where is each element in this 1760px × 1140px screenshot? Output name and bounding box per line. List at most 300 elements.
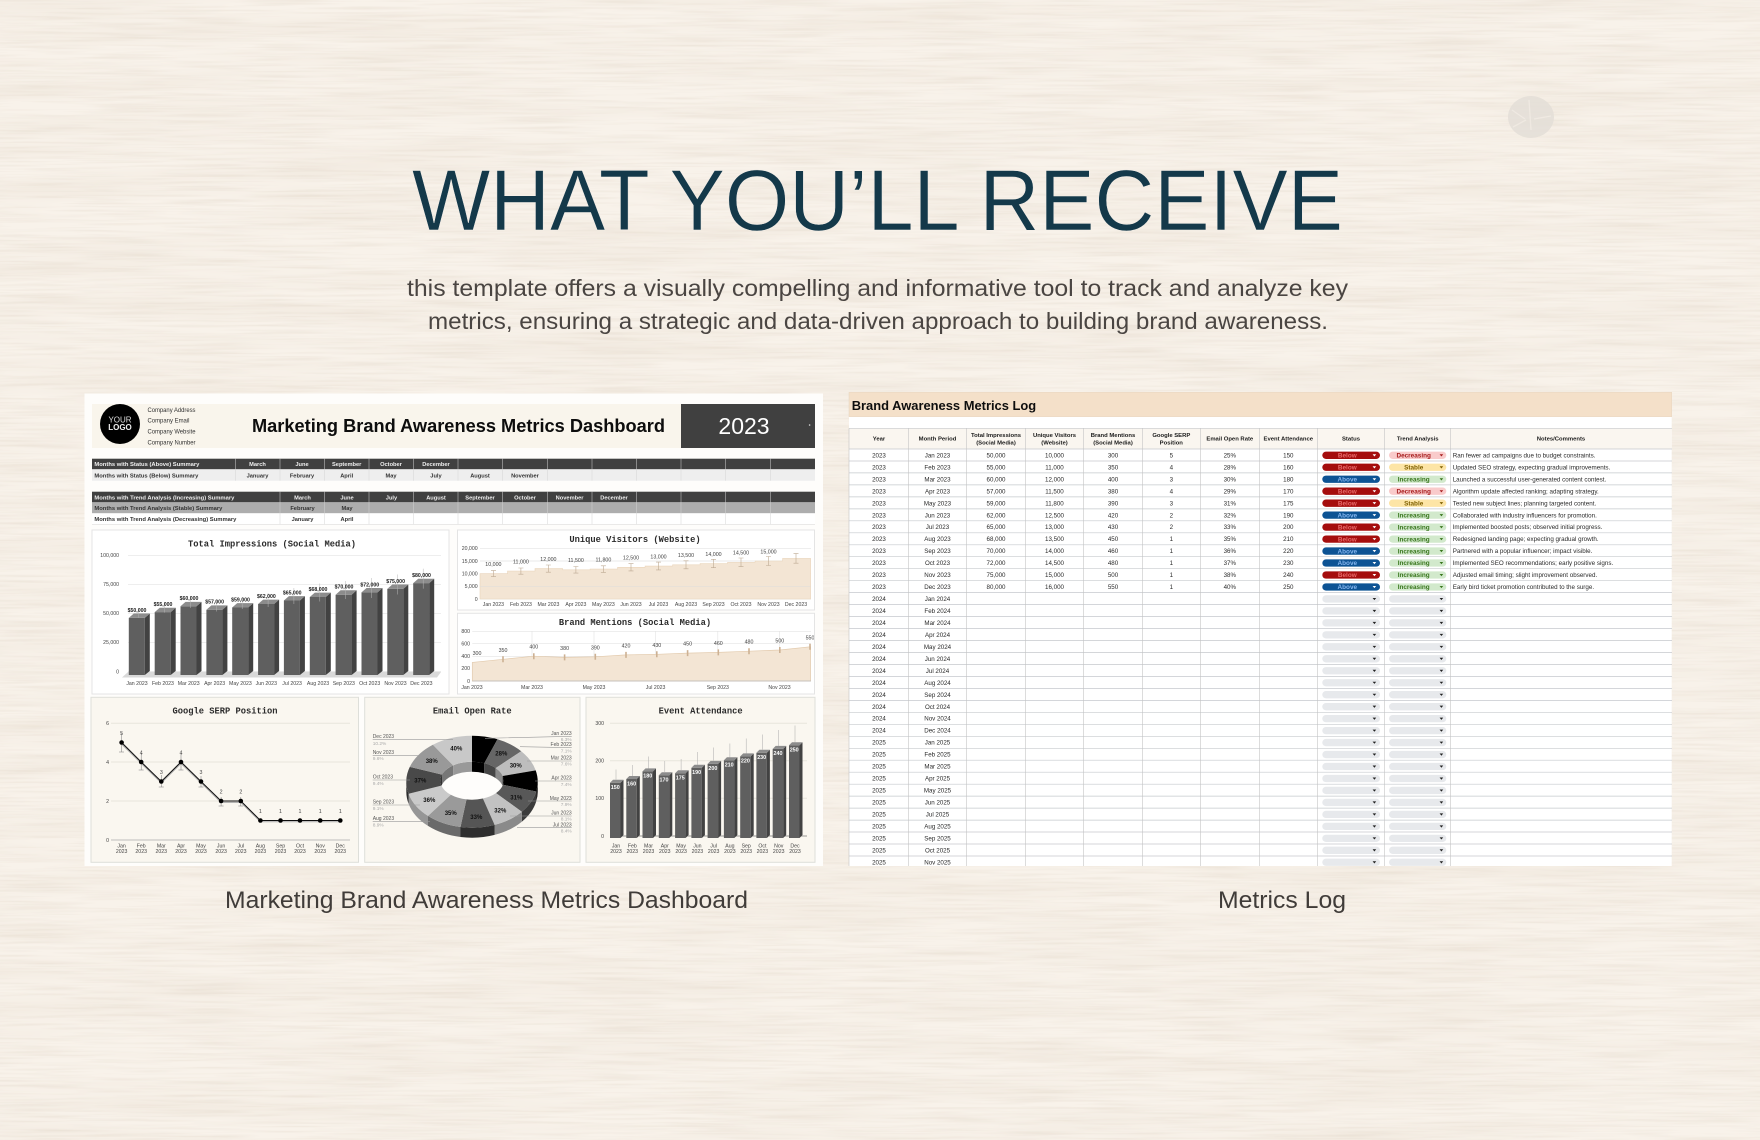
filled rows 2023: Increasing — [1398, 572, 1430, 579]
filled rows 2023: Stable — [1404, 500, 1424, 507]
bar value labels: $75,000 — [386, 579, 405, 585]
bar value labels: 190 — [692, 770, 701, 776]
bars — [129, 569, 434, 675]
x axis labels: Mar 2023 — [537, 602, 559, 608]
panel: unique visitors area chart: 0 — [475, 597, 478, 603]
filled rows 2023: 1 — [1170, 548, 1174, 555]
empty rows 2024: Apr 2024 — [925, 632, 951, 639]
filled rows 2023: 2023 — [872, 584, 886, 591]
left slice labels: 9.4% — [373, 781, 384, 787]
panel: dashboard preview — [84, 394, 823, 866]
trend summary table: December — [600, 495, 629, 501]
empty rows 2025: 2025 — [872, 740, 886, 747]
table header row: (Social Media) — [1093, 440, 1133, 446]
x axis labels: 2023 — [773, 849, 785, 855]
x axis labels: 2023 — [195, 849, 207, 855]
filled rows 2023: 170 — [1283, 488, 1294, 495]
area data labels: 350 — [499, 648, 507, 654]
x axis labels: Jun 2023 — [620, 602, 642, 608]
x axis labels: Oct — [758, 844, 767, 850]
x axis labels: Jan — [117, 844, 126, 850]
donut outer walls — [406, 782, 538, 838]
filled rows 2023: Collaborated with industry influencers for promotion. — [1453, 512, 1597, 519]
trend summary table: Months with Trend Analysis (Increasing) Summary — [94, 495, 235, 501]
bar value labels: $60,000 — [180, 596, 198, 602]
x axis labels: Apr 2023 — [204, 681, 225, 687]
filled rows 2023: Above — [1338, 560, 1358, 567]
filled rows 2023: Jun 2023 — [925, 512, 951, 519]
panel: metrics log table — [849, 392, 1672, 866]
filled rows 2023: 50,000 — [987, 452, 1006, 459]
empty rows 2024: Aug 2024 — [924, 680, 951, 687]
company details: Company Address — [148, 408, 196, 414]
status summary table: July — [430, 473, 443, 479]
trend summary table: November — [556, 495, 584, 501]
filled rows 2023: Below — [1338, 524, 1357, 531]
filled rows 2023: 240 — [1283, 572, 1294, 579]
x axis labels: Dec 2023 — [785, 602, 807, 608]
filled rows 2023: 5 — [1170, 452, 1174, 459]
area data labels: 13,000 — [650, 554, 667, 560]
empty rows 2025: May 2025 — [924, 788, 952, 795]
bar value labels: $59,000 — [231, 597, 250, 603]
status summary table: Months with Status (Below) Summary — [94, 473, 199, 479]
table header row: Total Impressions — [971, 433, 1022, 439]
left slice labels: 10.2% — [373, 741, 387, 747]
filled rows 2023: 175 — [1283, 500, 1294, 507]
status summary table: April — [340, 473, 354, 479]
chart heading: Unique Visitors (Website) — [569, 535, 701, 545]
x axis labels — [116, 844, 346, 855]
status summary table: March — [249, 462, 266, 468]
filled rows 2023: 12,000 — [1045, 476, 1065, 483]
empty rows 2024: Feb 2024 — [924, 608, 951, 615]
left slice labels: 9.1% — [373, 806, 384, 812]
stepped area — [480, 558, 811, 599]
right slice labels: Mar 2023 — [551, 756, 572, 762]
bar value labels: 220 — [741, 759, 750, 765]
filled rows 2023: 11,800 — [1045, 500, 1064, 507]
x axis labels: 2023 — [255, 849, 266, 855]
x axis labels: Jun 2023 — [256, 681, 277, 687]
right slice labels: Apr 2023 — [551, 776, 572, 782]
bar value labels: 175 — [676, 776, 685, 782]
table header row: Event Attendance — [1264, 436, 1314, 442]
point labels: 4 — [140, 750, 143, 756]
x axis labels: Jun — [693, 844, 702, 850]
filled rows 2023: Dec 2023 — [924, 584, 951, 591]
dashboard title: Marketing Brand Awareness Metrics Dashboard — [252, 416, 665, 436]
status summary table: June — [295, 462, 309, 468]
filled rows 2023: 14,000 — [1045, 548, 1065, 555]
filled rows 2023: Adjusted email timing; slight improvement observed. — [1453, 572, 1597, 579]
panel: brand mentions area chart — [458, 613, 814, 694]
x axis labels: Feb 2023 — [152, 681, 174, 687]
filled rows 2023: 300 — [1108, 452, 1119, 459]
left slice labels: Dec 2023 — [373, 734, 394, 740]
filled rows 2023: 35% — [1224, 536, 1236, 543]
bar value labels: 250 — [790, 748, 799, 754]
filled rows 2023: Increasing — [1398, 512, 1430, 519]
right slice labels: 8.4% — [561, 829, 572, 835]
empty rows 2025: Jan 2025 — [925, 740, 951, 747]
bar value labels: $57,000 — [205, 600, 224, 606]
filled rows 2023: 1 — [1170, 572, 1174, 579]
x axis labels: May — [676, 844, 686, 850]
empty rows 2024: 2024 — [872, 644, 886, 651]
area data labels — [485, 549, 777, 568]
table header row: Brand Mentions — [1091, 433, 1136, 439]
table header row: Trend Analysis — [1397, 436, 1439, 442]
x axis labels: May 2023 — [229, 681, 252, 687]
company details: Company Website — [148, 429, 196, 435]
x axis labels: Aug 2023 — [307, 681, 329, 687]
dashboard header band — [92, 404, 815, 448]
x axis labels: 2023 — [175, 849, 187, 855]
bar value labels: 160 — [627, 781, 636, 787]
filled rows 2023: 13,000 — [1045, 524, 1065, 531]
point labels: 2 — [239, 790, 242, 796]
x axis labels: Oct — [296, 844, 305, 850]
x axis labels: Jan — [612, 844, 620, 850]
bar value labels: 200 — [708, 766, 717, 772]
status summary table: May — [385, 473, 397, 479]
left slice labels: 8.9% — [373, 822, 384, 828]
filled rows 2023: 2023 — [872, 548, 886, 555]
filled rows 2023: 250 — [1283, 584, 1294, 591]
company details — [148, 408, 196, 446]
icon: company logo — [100, 404, 140, 444]
filled rows 2023: 10,000 — [1045, 452, 1065, 459]
panel: brand mentions area chart: 800 — [461, 629, 470, 635]
trend summary table: April — [341, 517, 354, 523]
x axis labels: Jul — [710, 844, 717, 850]
filled rows 2023: 460 — [1108, 548, 1119, 555]
bar value labels: $80,000 — [412, 573, 431, 579]
x axis labels: Nov — [774, 844, 784, 850]
filled rows 2023: 11,000 — [1045, 464, 1064, 471]
panel: total impressions bar chart: 100,000 — [100, 553, 119, 559]
error markers — [503, 644, 810, 662]
filled rows 2023: 3 — [1170, 500, 1174, 507]
filled rows 2023: 1 — [1170, 584, 1174, 591]
icon: company logo: YOUR — [108, 416, 132, 424]
bar value labels: 150 — [611, 785, 620, 791]
filled rows 2023: 59,000 — [987, 500, 1006, 507]
filled rows 2023: 2023 — [872, 572, 886, 579]
point labels: 3 — [200, 770, 203, 776]
filled rows 2023: Implemented boosted posts; observed initial progress. — [1453, 524, 1603, 531]
bar value labels: 240 — [774, 751, 782, 757]
bar value labels: 230 — [757, 755, 766, 761]
left slice labels — [373, 734, 394, 828]
filled rows 2023: 480 — [1108, 560, 1119, 567]
x axis labels: Oct 2023 — [359, 681, 380, 687]
filled rows 2023: 33% — [1224, 524, 1236, 531]
x axis labels: 2023 — [335, 849, 346, 855]
empty rows 2024: Jun 2024 — [925, 656, 951, 663]
filled rows 2023: Implemented SEO recommendations; early positive signs. — [1453, 560, 1613, 567]
filled rows 2023: Sep 2023 — [924, 548, 951, 555]
filled rows 2023: 2023 — [872, 488, 886, 495]
area data labels: 15,000 — [760, 549, 777, 555]
x axis labels — [126, 681, 433, 687]
empty rows 2025: 2025 — [872, 764, 886, 771]
x axis labels: Mar 2023 — [178, 681, 200, 687]
area data labels: 500 — [775, 638, 784, 644]
filled rows 2023: Aug 2023 — [924, 536, 951, 543]
filled rows 2023: 2023 — [872, 536, 886, 543]
bar value labels — [128, 573, 431, 614]
filled rows 2023: Mar 2023 — [924, 476, 951, 483]
panel: unique visitors area chart — [458, 530, 814, 610]
x axis labels: Mar — [644, 844, 653, 850]
filled rows 2023: 2 — [1170, 512, 1174, 519]
filled rows 2023: 32% — [1224, 512, 1236, 519]
empty rows 2024: Oct 2024 — [925, 704, 951, 711]
year selector — [681, 404, 815, 448]
x axis labels: Nov 2023 — [757, 602, 780, 608]
filled rows 2023: 180 — [1283, 476, 1294, 483]
filled rows 2023: 1 — [1170, 536, 1174, 543]
x axis labels: 2023 — [724, 849, 736, 855]
table header row: Email Open Rate — [1206, 436, 1254, 442]
trend summary table: August — [426, 495, 446, 501]
point labels: 1 — [259, 809, 262, 815]
x axis labels: 2023 — [135, 849, 147, 855]
subtitle text: this template offers a visually compelling and informative tool to track and analyze key — [407, 275, 1348, 301]
x axis labels: Jul 2023 — [646, 685, 666, 691]
chart heading: Google SERP Position — [172, 706, 278, 716]
table header row: Notes/Comments — [1537, 436, 1586, 442]
slice percentage labels: 35% — [445, 811, 457, 817]
empty rows 2025 — [872, 739, 1446, 866]
panel: event attendance bar chart: 100 — [595, 796, 604, 802]
x axis labels: Jan 2023 — [126, 681, 148, 687]
leader lines — [373, 736, 572, 828]
filled rows 2023: Below — [1338, 452, 1357, 459]
area data labels: 11,000 — [513, 560, 529, 566]
status summary table: Months with Status (Above) Summary — [94, 462, 200, 468]
filled rows 2023: 160 — [1283, 464, 1294, 471]
x axis labels: Mar — [157, 844, 166, 850]
x axis labels: 2023 — [627, 849, 638, 855]
x axis labels: 2023 — [757, 849, 768, 855]
x axis labels: 2023 — [789, 849, 801, 855]
x axis labels: Jul 2023 — [649, 602, 668, 608]
subtitle text — [407, 275, 1348, 334]
empty rows 2025: Mar 2025 — [924, 764, 951, 771]
filled rows 2023: 4 — [1170, 464, 1174, 471]
empty rows 2024: Nov 2024 — [924, 716, 951, 723]
trend summary table: January — [292, 517, 314, 523]
status summary table: December — [422, 462, 451, 468]
panel: google serp line chart: 4 — [106, 760, 109, 766]
filled rows 2023: 29% — [1224, 488, 1236, 495]
filled rows 2023: 2023 — [872, 452, 886, 459]
empty rows 2024: 2024 — [872, 608, 886, 615]
x axis labels: Apr — [661, 844, 669, 850]
filled rows 2023: 380 — [1108, 488, 1119, 495]
filled rows 2023: 16,000 — [1045, 584, 1065, 591]
panel: brand mentions area chart: 0 — [467, 679, 470, 685]
empty rows 2024: 2024 — [872, 692, 886, 699]
slice percentage labels: 31% — [510, 796, 523, 802]
filled rows 2023: 30% — [1224, 476, 1236, 483]
panel: total impressions bar chart: 50,000 — [103, 611, 119, 617]
area data labels: 390 — [591, 645, 600, 651]
filled rows 2023: Ran fewer ad campaigns due to budget constraints. — [1453, 452, 1596, 459]
panel: google serp line chart: 0 — [106, 838, 109, 844]
x axis labels: 2023 — [740, 849, 752, 855]
point labels: 1 — [319, 809, 322, 815]
filled rows 2023: Jan 2023 — [925, 452, 951, 459]
filled rows 2023: Increasing — [1398, 476, 1430, 483]
x axis labels — [610, 844, 801, 855]
filled rows 2023: Below — [1338, 536, 1357, 543]
empty rows 2024: Dec 2024 — [924, 728, 951, 735]
right slice labels: May 2023 — [550, 796, 572, 802]
table header row: Month Period — [919, 436, 957, 442]
point labels: 2 — [220, 790, 223, 796]
table header row: Unique Visitors — [1033, 433, 1077, 439]
x axis labels: Apr — [177, 844, 185, 850]
empty rows 2025: Sep 2025 — [924, 835, 951, 842]
left slice labels: Sep 2023 — [373, 800, 394, 806]
slice percentage labels — [414, 746, 523, 821]
x axis labels — [483, 602, 807, 608]
filled rows 2023: 420 — [1108, 512, 1119, 519]
x axis labels: Sep 2023 — [702, 602, 725, 608]
x axis labels: Mar 2023 — [521, 685, 543, 691]
panel: unique visitors area chart: 20,000 — [462, 546, 478, 552]
right slice labels: Jun 2023 — [551, 811, 572, 817]
filled rows 2023: 11,500 — [1045, 488, 1064, 495]
filled rows 2023: 190 — [1283, 512, 1294, 519]
filled rows 2023: Increasing — [1398, 536, 1430, 543]
empty rows 2024: 2024 — [872, 704, 886, 711]
trend summary table: October — [514, 495, 537, 501]
filled rows 2023: 57,000 — [987, 488, 1006, 495]
area data labels: 400 — [529, 645, 538, 651]
x axis labels: 2023 — [156, 849, 167, 855]
x axis labels: Oct 2023 — [730, 602, 752, 608]
filled rows 2023: 12,500 — [1045, 512, 1065, 519]
bar value labels: $50,000 — [128, 608, 146, 614]
filled rows 2023: 220 — [1283, 548, 1294, 555]
filled rows 2023: 80,000 — [987, 584, 1006, 591]
filled rows 2023: Decreasing — [1396, 452, 1431, 459]
x axis labels: 2023 — [294, 849, 306, 855]
chart heading: Brand Mentions (Social Media) — [559, 618, 711, 628]
empty rows 2024: 2024 — [872, 620, 886, 627]
chart heading: Email Open Rate — [433, 706, 512, 716]
slice percentage labels: 28% — [495, 752, 508, 758]
empty rows 2025: 2025 — [872, 835, 886, 842]
trend summary table: March — [294, 495, 311, 501]
panel: event attendance bar chart — [586, 697, 815, 862]
x axis labels: 2023 — [314, 849, 326, 855]
slice percentage labels: 33% — [470, 815, 483, 821]
empty rows 2024: Sep 2024 — [924, 692, 951, 699]
panel: total impressions bar chart: 75,000 — [103, 582, 119, 588]
filled rows 2023: 62,000 — [987, 512, 1006, 519]
empty rows 2025: 2025 — [872, 800, 886, 807]
area — [472, 647, 811, 681]
panel: unique visitors area chart: 15,000 — [462, 559, 478, 565]
table header row — [849, 428, 1672, 449]
status summary table: February — [290, 473, 315, 479]
filled rows 2023: 2023 — [872, 464, 886, 471]
status summary table — [92, 459, 815, 481]
x axis labels: Jul 2023 — [282, 681, 302, 687]
slice percentage labels: 36% — [423, 798, 436, 804]
x axis labels: Jan 2023 — [461, 685, 483, 691]
bar value labels: $65,000 — [283, 590, 302, 596]
x axis labels: Apr 2023 — [565, 602, 587, 608]
filled rows 2023: Apr 2023 — [925, 488, 951, 495]
status summary table: November — [511, 473, 540, 479]
filled rows 2023: 2023 — [872, 560, 886, 567]
table header row: Position — [1160, 440, 1183, 446]
trend summary table: June — [340, 495, 354, 501]
x axis labels: 2023 — [235, 849, 247, 855]
filled rows 2023: 14,500 — [1045, 560, 1065, 567]
empty rows 2025: Aug 2025 — [924, 823, 951, 830]
right slice labels: 7.1% — [561, 748, 572, 754]
x axis labels: May 2023 — [583, 685, 605, 691]
filled rows 2023: 72,000 — [987, 560, 1006, 567]
trend summary table: July — [386, 495, 398, 501]
filled rows 2023: 210 — [1283, 536, 1294, 543]
filled rows 2023: 2023 — [872, 512, 886, 519]
filled rows 2023: Stable — [1404, 464, 1424, 471]
x axis labels: 2023 — [692, 849, 703, 855]
donut slices — [406, 736, 538, 828]
x axis labels: May — [196, 844, 206, 850]
trend summary table: Months with Trend Analysis (Stable) Summary — [94, 506, 223, 512]
filled rows 2023: Early bird ticket promotion contributed to the surge. — [1453, 584, 1594, 591]
filled rows 2023: 400 — [1108, 476, 1119, 483]
table title band: Brand Awareness Metrics Log — [852, 398, 1036, 413]
filled rows 2023: Increasing — [1398, 584, 1430, 591]
table header row: (Website) — [1041, 440, 1068, 446]
filled rows 2023: 75,000 — [987, 572, 1006, 579]
filled rows 2023: 230 — [1283, 560, 1294, 567]
slice percentage labels: 38% — [426, 759, 438, 765]
filled rows 2023: Above — [1338, 584, 1358, 591]
filled rows 2023: 450 — [1108, 536, 1119, 543]
trend summary table: May — [341, 506, 353, 512]
trend summary table: Months with Trend Analysis (Decreasing) Summary — [94, 517, 237, 523]
area data labels: 14,500 — [733, 551, 749, 557]
icon: wood knot — [1508, 96, 1554, 138]
empty rows 2024: 2024 — [872, 716, 886, 723]
empty rows 2025: Oct 2025 — [925, 847, 951, 854]
panel: google serp line chart — [91, 697, 358, 862]
panel: email open rate donut chart — [365, 697, 580, 862]
slice percentage labels: 40% — [450, 746, 463, 752]
filled rows 2023: Redesigned landing page; expecting gradual growth. — [1453, 536, 1599, 543]
panel: google serp line chart: 6 — [106, 721, 109, 727]
chart heading: Total Impressions (Social Media) — [188, 539, 356, 549]
filled rows 2023: 13,500 — [1045, 536, 1065, 543]
bar value labels: $72,000 — [360, 582, 379, 588]
empty rows 2025: 2025 — [872, 752, 886, 759]
x axis labels: 2023 — [643, 849, 654, 855]
point labels: 1 — [339, 809, 342, 815]
x axis labels: 2023 — [675, 849, 687, 855]
